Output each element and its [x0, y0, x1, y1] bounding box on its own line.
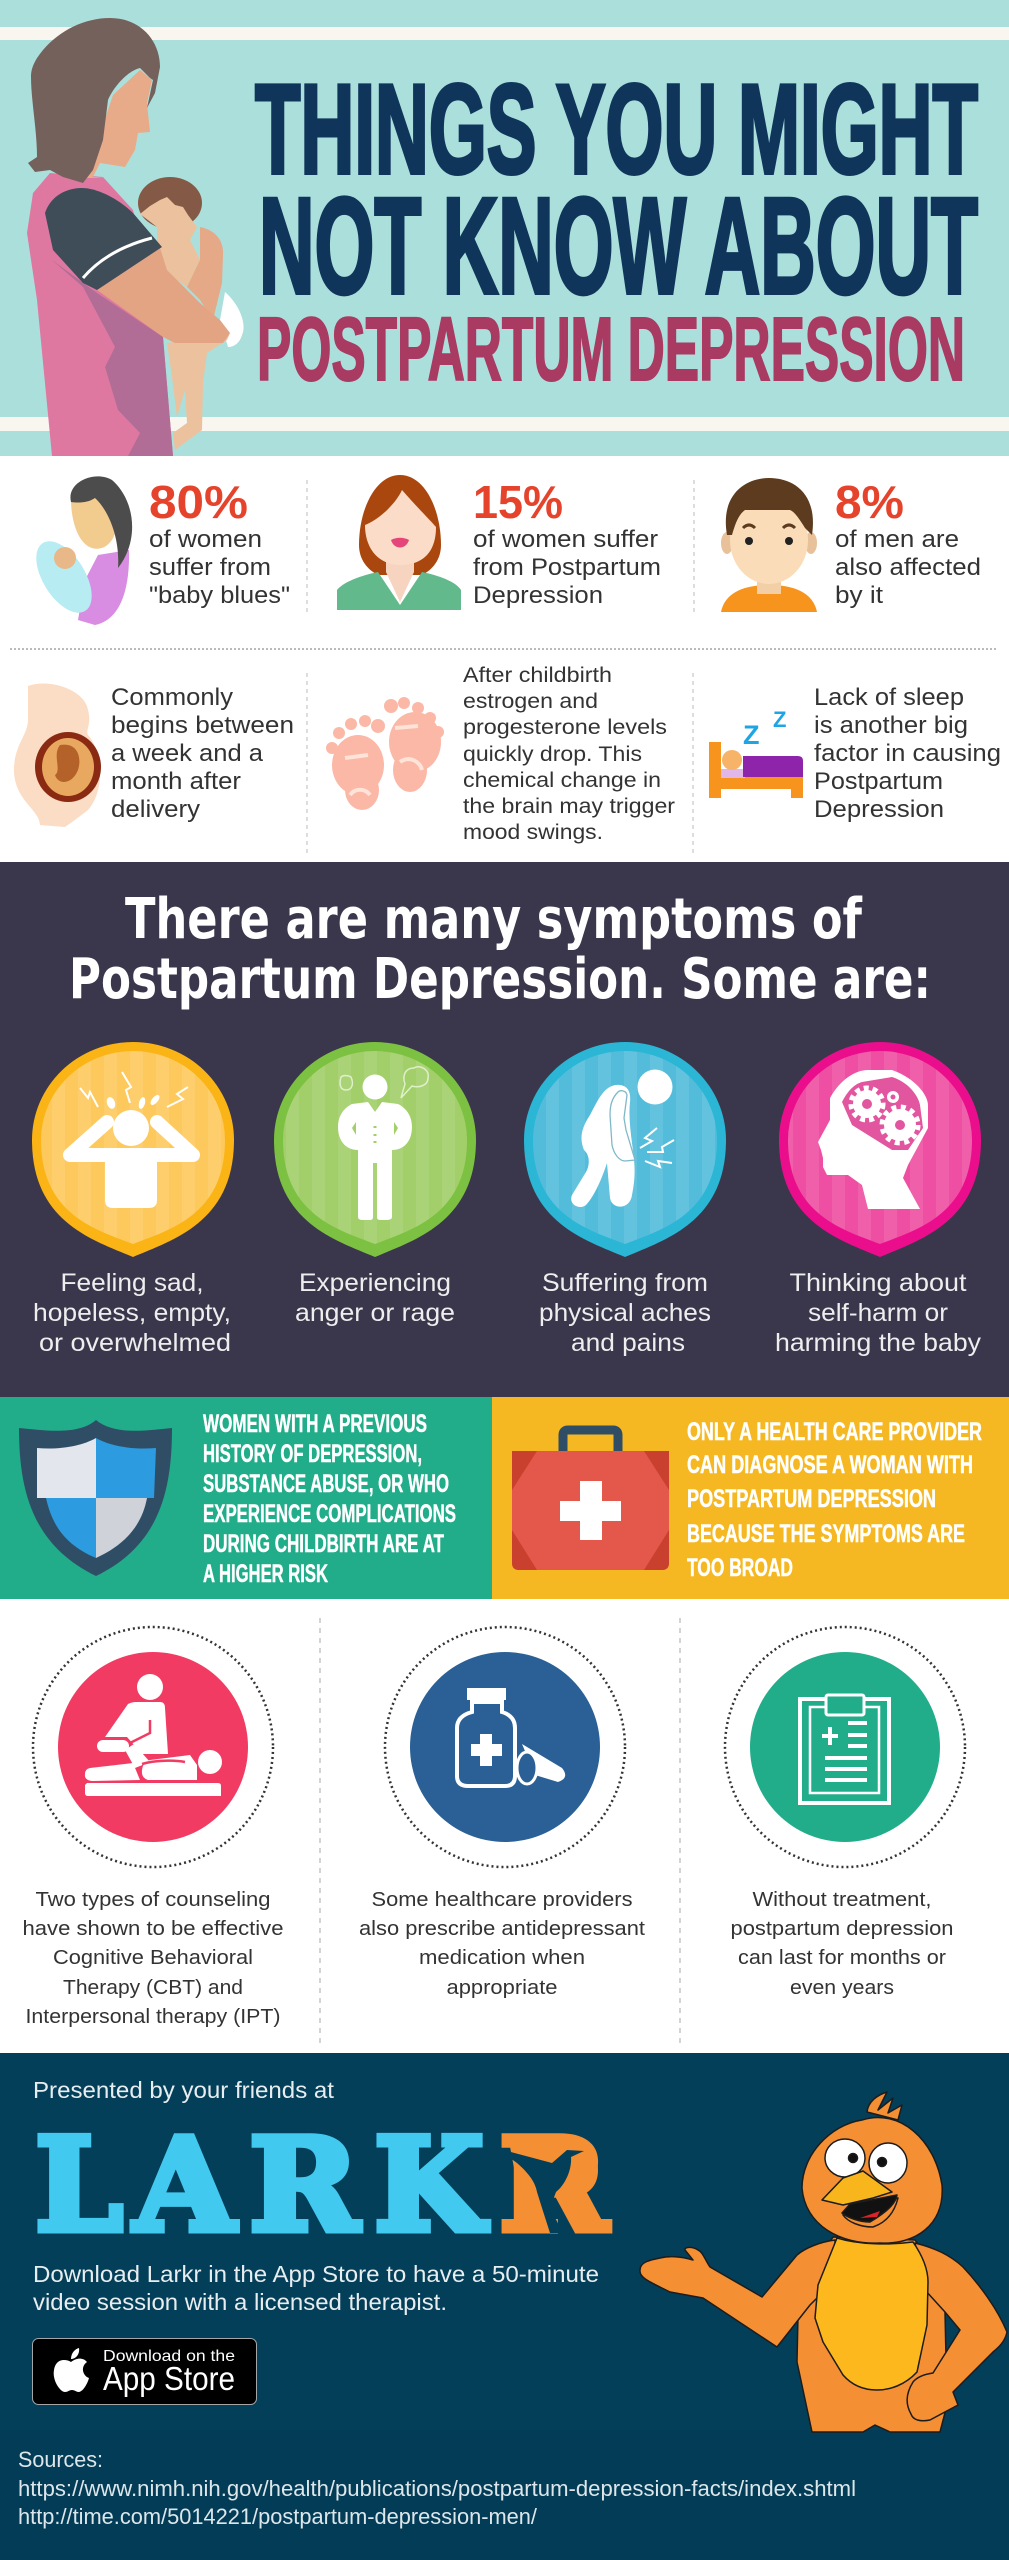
stat: 80%: suffer from [149, 554, 271, 581]
stat: 80% [149, 476, 290, 609]
text: medication: medication when [419, 1947, 585, 1969]
caption: self-harm: self-harm or [808, 1299, 948, 1327]
text: sources: http://time.com/5014221/postpartum-depression-men/ [18, 2504, 538, 2529]
caption: self-harm: harming the baby [775, 1329, 982, 1357]
text: lack of sleep: factor in causing [814, 740, 1001, 767]
caption: self-harm: Thinking about [790, 1269, 967, 1297]
text: medication: Some healthcare providers [372, 1889, 632, 1911]
text: risk factors: SUBSTANCE ABUSE, OR WHO [203, 1470, 449, 1498]
text: hormones: progesterone levels [463, 716, 667, 739]
mascot: orange bird [640, 2092, 1007, 2432]
icon: pregnant belly [14, 683, 101, 827]
text: risk factors: EXPERIENCE COMPLICATIONS [203, 1500, 456, 1528]
text: download [33, 2261, 599, 2315]
text: hormones [463, 664, 675, 844]
text: download: video session with a licensed therapist. [33, 2289, 447, 2315]
text: hormones: estrogen and [463, 690, 598, 713]
text: hormones: mood swings. [463, 821, 603, 844]
text: without treatment: postpartum depression [730, 1918, 954, 1940]
stat: 8%: also affected [835, 554, 981, 581]
logo: Larkr: R [249, 2111, 361, 2261]
stat: 8%: by it [835, 582, 883, 609]
caption: aches: Suffering from [542, 1269, 708, 1297]
text: counseling: Interpersonal therapy (IPT) [26, 2006, 280, 2028]
icon: woman with baby [25, 476, 132, 625]
text: hormones: quickly drop. This [463, 743, 642, 766]
text: when it begins: delivery [111, 796, 200, 823]
caption: sad [33, 1269, 231, 1357]
text: counseling: have shown to be effective [22, 1918, 284, 1940]
caption: aches [539, 1269, 711, 1357]
heading: symptoms [69, 887, 931, 1012]
stat: 15%: from Postpartum [473, 554, 661, 581]
icon: baby feet [326, 697, 444, 810]
icon pin: angry man [274, 1042, 476, 1257]
text: when it begins: month after [111, 768, 241, 795]
text: counseling [22, 1889, 284, 2028]
text: lack of sleep: Postpartum [814, 768, 943, 795]
text: when it begins: Commonly [111, 684, 233, 711]
logo: Larkr: K [374, 2111, 489, 2261]
panel: statistics row [25, 475, 981, 625]
caption: anger: Experiencing [299, 1269, 451, 1297]
text: diagnosis: TOO BROAD [687, 1554, 793, 1582]
text: counseling: Two types of counseling [36, 1889, 270, 1911]
caption: aches: physical aches [539, 1299, 711, 1327]
stat: 8%: 8% [835, 476, 904, 528]
icon pin: physical aches [524, 1042, 726, 1257]
stat: 15%: 15% [473, 476, 563, 528]
text: risk factors [203, 1410, 456, 1588]
title [255, 58, 978, 400]
text: risk factors: DURING CHILDBIRTH ARE AT [203, 1530, 444, 1558]
button: App Store: Download on the [103, 2348, 235, 2365]
icon: shield [19, 1420, 172, 1576]
text: download: Download Larkr in the App Store to have a 50-minute [33, 2261, 599, 2287]
icon: person sleeping in bed: Z [773, 707, 786, 732]
stat: 80%: of women [149, 526, 262, 553]
panel: symptoms [0, 862, 1009, 1397]
panel: facts row [14, 664, 1001, 855]
panel: diagnosis (yellow) [492, 1397, 1009, 1599]
icon: medicine bottle and pills [385, 1627, 625, 1867]
text: sources: Sources: [18, 2447, 103, 2472]
icon: therapy massage [33, 1627, 273, 1867]
text: without treatment: Without treatment, [752, 1889, 932, 1911]
icon: person sleeping in bed [709, 707, 803, 798]
icon: person sleeping in bed: Z [743, 720, 760, 750]
icon: woman with red hair [337, 475, 461, 610]
icon: clipboard [725, 1627, 965, 1867]
text: hormones: After childbirth [463, 664, 612, 687]
icon pin: sad, hands on head [32, 1042, 234, 1257]
stat: 15%: of women suffer [473, 526, 658, 553]
text: when it begins: a week and a [111, 740, 264, 767]
text: hormones: chemical change in [463, 769, 661, 792]
text: when it begins: begins between [111, 712, 294, 739]
logo: Larkr: A [133, 2111, 237, 2261]
text: diagnosis [687, 1418, 982, 1582]
button: App Store: App Store [103, 2360, 235, 2397]
text: lack of sleep: Lack of sleep [814, 684, 964, 711]
logo: Larkr [35, 2111, 610, 2261]
text: lack of sleep: is another big [814, 712, 968, 739]
text: counseling: Therapy (CBT) and [63, 1977, 243, 1999]
caption: sad: hopeless, empty, [33, 1299, 231, 1327]
text: hormones: the brain may trigger [463, 795, 675, 818]
text: medication: appropriate [446, 1977, 558, 1999]
text: presented by: Presented by your friends at [33, 2077, 335, 2103]
text: risk factors: HISTORY OF DEPRESSION, [203, 1440, 422, 1468]
text: counseling: Cognitive Behavioral [53, 1947, 253, 1969]
caption: self-harm [775, 1269, 982, 1357]
icon: first aid kit [512, 1430, 669, 1570]
text: without treatment [730, 1889, 954, 1999]
stat: 8%: of men are [835, 526, 959, 553]
caption: anger: anger or rage [295, 1299, 455, 1327]
icon: apple [54, 2348, 89, 2392]
caption: sad: or overwhelmed [39, 1329, 231, 1357]
caption: anger [295, 1269, 455, 1327]
text: medication [359, 1889, 645, 1999]
text: without treatment: even years [790, 1977, 894, 1999]
illustration: mother holding baby [27, 18, 244, 456]
header banner [0, 0, 1009, 456]
text: risk factors: A HIGHER RISK [203, 1560, 328, 1588]
text: lack of sleep: Depression [814, 796, 944, 823]
text: medication: also prescribe antidepressant [359, 1918, 645, 1940]
text: risk factors: WOMEN WITH A PREVIOUS [203, 1410, 427, 1438]
icon: man [721, 478, 817, 612]
panel: risk factors (green) [0, 1397, 492, 1599]
caption: sad: Feeling sad, [60, 1269, 204, 1297]
stat: 8% [835, 476, 981, 609]
panel: footer [0, 2053, 1009, 2560]
text: without treatment: can last for months or [738, 1947, 946, 1969]
stat: 80%: 80% [149, 476, 248, 528]
icon pin: thinking, head with gears [779, 1042, 981, 1257]
panel: treatment [22, 1618, 965, 2043]
button: App Store [32, 2338, 256, 2404]
text: sources [18, 2447, 856, 2529]
caption: aches: and pains [571, 1329, 685, 1357]
text: sources: https://www.nimh.nih.gov/health/publications/postpartum-depression-facts/index.shtml [18, 2476, 856, 2501]
logo: Larkr: R [499, 2111, 610, 2261]
stat: 15%: Depression [473, 582, 603, 609]
stat: 80%: "baby blues" [149, 582, 290, 609]
text: lack of sleep [814, 684, 1001, 823]
stat: 15% [473, 476, 661, 609]
text: when it begins [111, 684, 294, 823]
logo: Larkr: L [35, 2111, 123, 2261]
